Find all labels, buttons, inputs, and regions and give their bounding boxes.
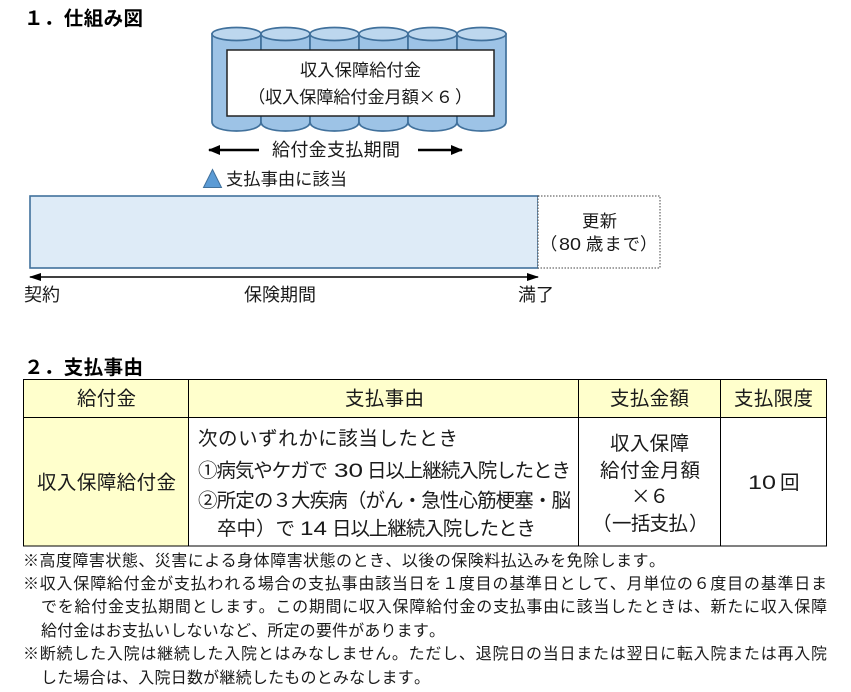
note 1: ※高度障害状態、災害による身体障害状態のとき、以後の保険料払込みを免除します。 <box>23 552 665 570</box>
box: renewal: 歳まで <box>586 234 640 254</box>
note 3 <box>23 645 827 687</box>
label: insurance period: 保険期間 <box>244 285 316 305</box>
box: renewal: ） <box>640 230 657 255</box>
cell: payment amount: 収入保障 <box>610 433 689 455</box>
cylinder 4 <box>359 28 408 131</box>
cell: payment amount: ×６ <box>631 480 669 509</box>
table cell backgrounds <box>24 380 826 546</box>
note 2: 給付金はお支払いしないなど、所定の要件があります。 <box>41 622 445 640</box>
table header row <box>77 388 813 410</box>
cell: payment conditions: 日以上継続入院したとき <box>332 518 536 540</box>
label: maturity: 満了 <box>518 285 554 305</box>
table header row: 支払限度 <box>734 388 813 410</box>
label box: benefit amount: （ <box>248 83 265 108</box>
box: renewal <box>538 196 660 268</box>
cell: payment limit: 回 <box>780 472 800 494</box>
cell: payment conditions <box>198 428 571 540</box>
arrow: insurance period span <box>30 276 538 278</box>
cylinder 5 <box>408 28 457 131</box>
label box: benefit amount: ） <box>455 83 472 108</box>
heading: section 2: ２．支払事由 <box>24 351 143 380</box>
cylinder 3 <box>310 28 359 131</box>
note 3: した場合は、入院日数が継続したものとみなします。 <box>41 669 430 687</box>
arrow: payment period left <box>209 149 259 151</box>
table header row: 給付金 <box>77 388 136 410</box>
cell: payment conditions: 30 <box>334 460 363 482</box>
bar: insurance period <box>30 196 538 268</box>
cell: payment conditions: ①病気やケガで <box>198 460 328 482</box>
table grid <box>24 380 826 546</box>
cell: benefit name: 収入保障給付金 <box>37 472 176 494</box>
cell: payment amount: ） <box>689 507 709 536</box>
box: renewal: 更新 <box>582 211 617 231</box>
label: contract start: 契約 <box>24 285 60 305</box>
label box: benefit amount: 収入保障給付金月額×６ <box>265 83 453 108</box>
diagram: benefit cylinders <box>212 28 506 131</box>
label: payment period: 給付金支払期間 <box>272 140 400 160</box>
heading: section 1: １．仕組み図 <box>24 2 143 31</box>
cell: payment conditions: ②所定の３大疾病（がん・急性心筋梗塞・脳 <box>198 490 571 512</box>
table header row: 支払事由 <box>345 388 424 410</box>
table: payment conditions <box>24 380 826 546</box>
label: payment trigger: 支払事由に該当 <box>226 169 347 189</box>
notes <box>23 552 827 687</box>
cell: payment conditions: 卒中）で <box>217 518 295 540</box>
cell: payment conditions: 次のいずれかに該当したとき <box>198 428 458 450</box>
cell: payment amount: （ <box>592 507 612 536</box>
cylinder 1 <box>212 28 261 131</box>
label box: benefit amount <box>227 50 494 116</box>
note 2: でを給付金支払期間とします。この期間に収入保障給付金の支払事由に該当したときは、新たに収入保障 <box>41 598 827 616</box>
cell: payment limit: 10 <box>748 472 776 494</box>
table header row: 支払金額 <box>610 388 689 410</box>
cylinder 6 <box>457 28 506 131</box>
cell: payment amount: 一括支払 <box>612 513 688 535</box>
box: renewal: 80 <box>559 234 581 254</box>
cell: payment conditions: 14 <box>300 518 327 540</box>
note 2 <box>23 575 827 640</box>
label box: benefit amount: 収入保障給付金 <box>300 60 421 80</box>
cell: payment limit <box>748 472 800 494</box>
cell: payment amount <box>592 433 709 536</box>
note 2: ※収入保障給付金が支払われる場合の支払事由該当日を１度目の基準日として、月単位の６度目の基準日ま <box>23 575 827 593</box>
note 3: ※断続した入院は継続した入院とはみなしません。ただし、退院日の当日または翌日に転入院または再入院 <box>23 645 827 663</box>
arrow: payment period right <box>418 149 462 151</box>
cell: payment amount: 給付金月額 <box>600 460 700 482</box>
box: renewal: （ <box>540 230 557 255</box>
icon: trigger triangle <box>204 170 222 188</box>
cell: payment conditions: 日以上継続入院したとき <box>367 460 571 482</box>
cylinder 2 <box>261 28 310 131</box>
